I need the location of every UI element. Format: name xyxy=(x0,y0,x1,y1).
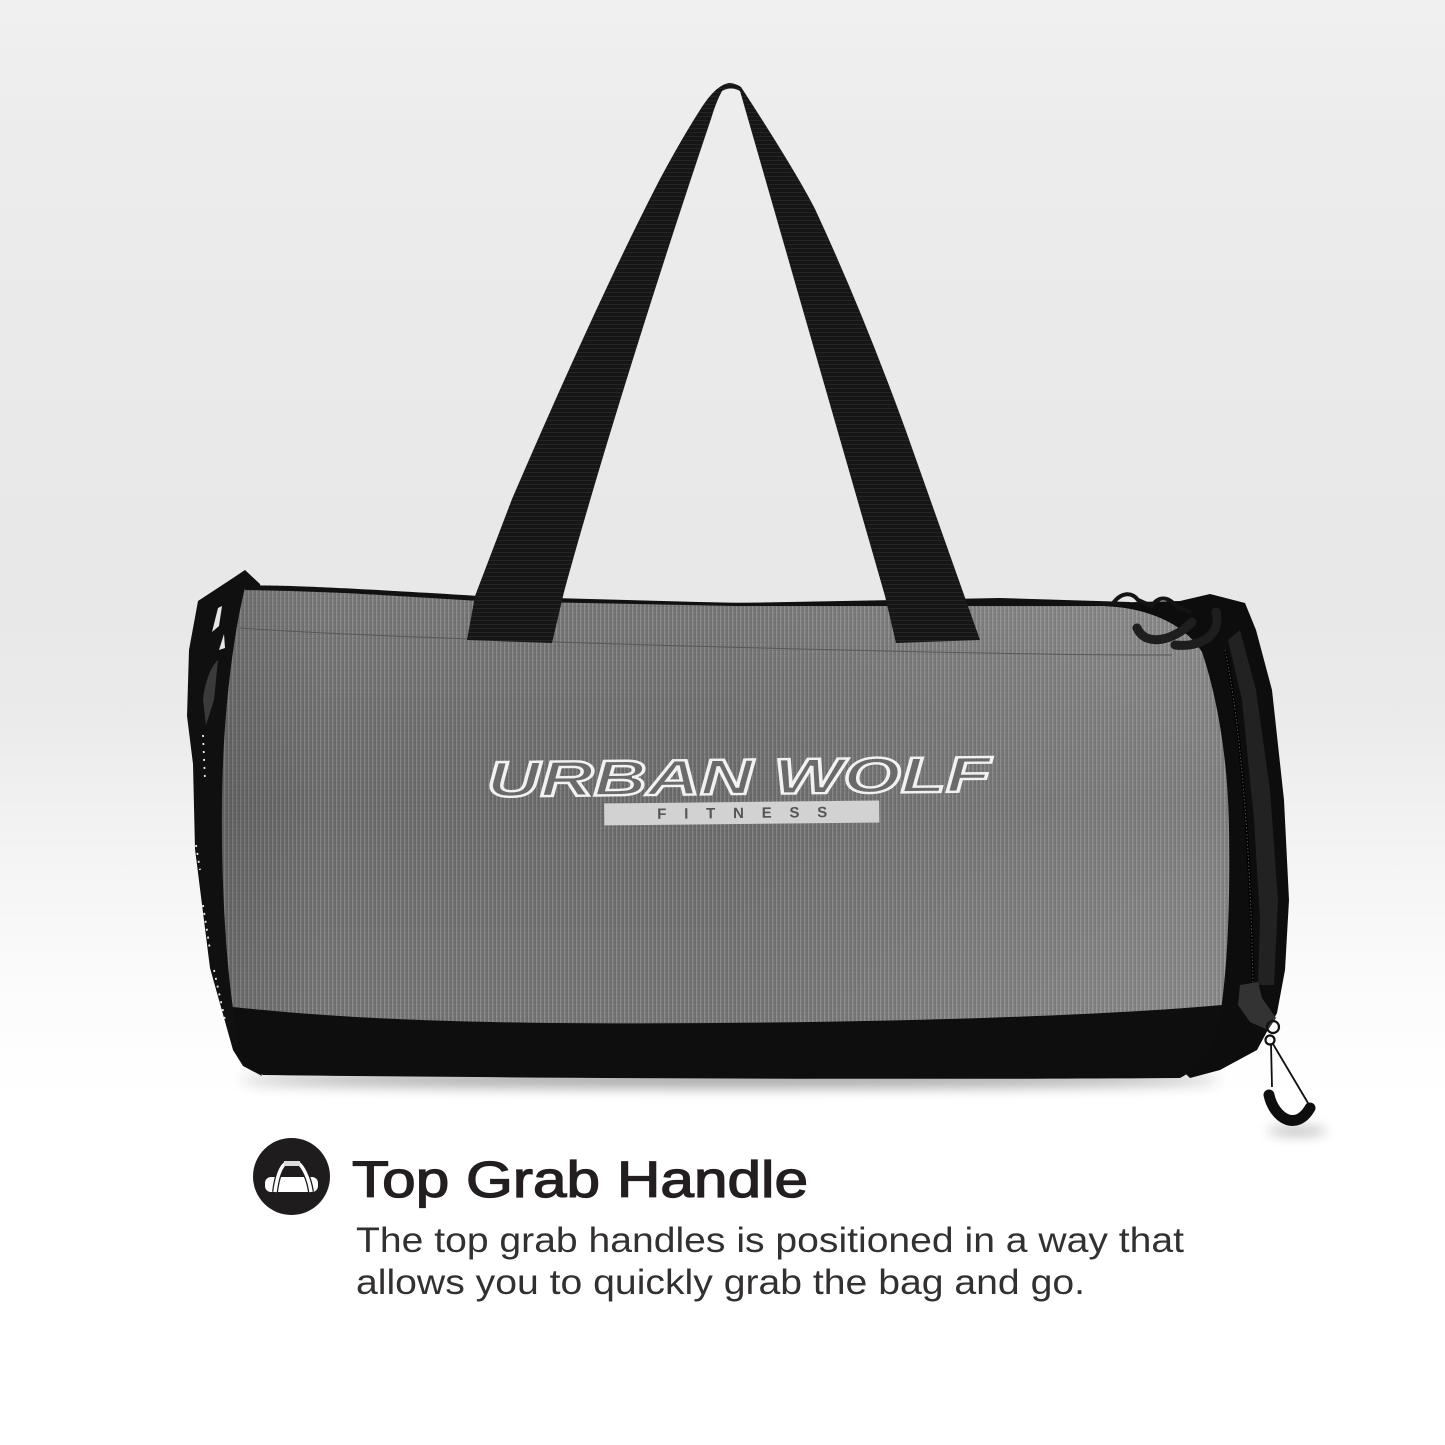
heading: Top Grab Handle xyxy=(352,1151,808,1208)
description text: allows you to quickly grab the bag and go. xyxy=(356,1263,1085,1302)
description text xyxy=(356,1221,1184,1302)
top edge binding xyxy=(245,586,1130,606)
brand logo: Urban Wolf Fitness xyxy=(487,746,993,827)
bottom black base band xyxy=(233,1005,1222,1079)
icon: duffel bag in circle xyxy=(253,1138,330,1215)
duffel bag product illustration xyxy=(187,83,1327,1135)
feature caption xyxy=(253,1138,1184,1302)
right end: black zip panel xyxy=(1100,594,1289,1078)
zipper pull at lower right xyxy=(1238,982,1310,1121)
brand logo: Urban Wolf Fitness: URBAN WOLF xyxy=(487,746,993,808)
ground shadow xyxy=(240,1073,1327,1135)
left end: side mesh pocket and strap loop xyxy=(187,570,262,1076)
right end: top zip pulls and rings xyxy=(1114,594,1217,645)
brand logo: Urban Wolf Fitness: FITNESS xyxy=(657,804,827,823)
description text: The top grab handles is positioned in a way that xyxy=(356,1221,1184,1260)
fabric body xyxy=(222,588,1229,1026)
top grab handles xyxy=(467,83,980,643)
